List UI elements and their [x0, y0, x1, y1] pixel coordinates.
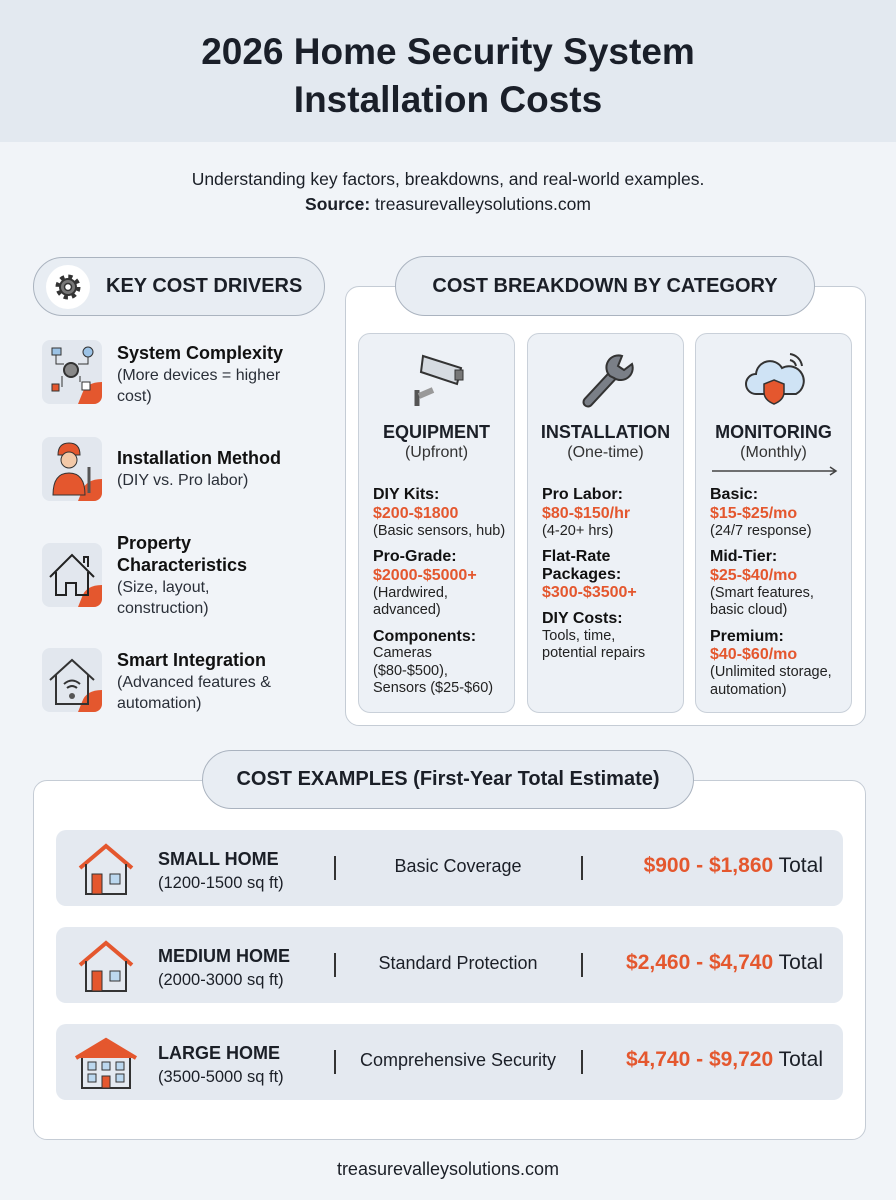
title	[201, 31, 695, 120]
column: monitoring: $40-$60/mo	[710, 646, 797, 663]
column: monitoring: MONITORING	[715, 422, 832, 442]
row: small home: $900 - $1,860 Total	[644, 854, 823, 877]
row: small home: Basic Coverage	[394, 856, 522, 876]
pill: key cost drivers	[33, 257, 325, 316]
column: installation: (One-time)	[567, 444, 644, 461]
column: monitoring: $15-$25/mo	[710, 504, 797, 522]
driver: smart integration	[42, 648, 102, 712]
subtitle: Source: treasurevalleysolutions.com	[305, 194, 591, 214]
title: 2026 Home Security System	[201, 31, 695, 72]
column: monitoring	[695, 333, 852, 713]
icon: smart house	[42, 648, 102, 712]
row: medium home: (2000-3000 sq ft)	[158, 971, 284, 989]
driver: property characteristics	[42, 543, 102, 607]
panel: cost examples	[33, 780, 866, 1140]
pill: cost examples heading	[202, 750, 694, 809]
text: smart integration: Smart Integration	[117, 650, 266, 670]
footer: treasurevalleysolutions.com	[337, 1159, 559, 1179]
driver: system complexity	[42, 340, 102, 404]
text: system complexity	[117, 343, 283, 405]
text: installation method: (DIY vs. Pro labor)	[117, 472, 248, 489]
column: installation: INSTALLATION	[541, 422, 670, 442]
row: large home: LARGE HOME	[158, 1043, 280, 1063]
text: property characteristics: construction)	[117, 600, 209, 617]
column: monitoring: $25-$40/mo	[710, 566, 797, 584]
column: equipment	[358, 333, 515, 713]
column: equipment: Pro-Grade:	[373, 548, 457, 565]
icon: wrench	[582, 354, 634, 408]
title: Installation Costs	[294, 79, 602, 120]
row: large home: (3500-5000 sq ft)	[158, 1068, 284, 1086]
arrow	[712, 466, 838, 476]
icon: camera	[414, 354, 464, 406]
column: monitoring: Mid-Tier:	[710, 548, 777, 565]
column: installation: Packages:	[542, 566, 621, 582]
icon: medium house	[78, 940, 134, 992]
column: equipment: DIY Kits:	[373, 486, 439, 503]
column: installation: $80-$150/hr	[542, 504, 630, 522]
row: small home: SMALL HOME	[158, 849, 279, 869]
text: smart integration: (Advanced features &	[117, 674, 271, 691]
column: installation: Pro Labor:	[542, 486, 623, 503]
column: installation: $300-$3500+	[542, 584, 637, 601]
column: equipment: ($80-$500),	[373, 662, 448, 678]
pill: cost breakdown heading	[395, 256, 815, 316]
column: equipment: EQUIPMENT	[383, 422, 490, 442]
column: installation	[527, 333, 684, 713]
text: system complexity: System Complexity	[117, 343, 283, 363]
text: property characteristics: Characteristics	[117, 555, 247, 575]
icon: house outline	[42, 543, 102, 607]
row: medium home: MEDIUM HOME	[158, 946, 290, 966]
row: small home: (1200-1500 sq ft)	[158, 874, 284, 892]
column: equipment: $2000-$5000+	[373, 566, 477, 584]
column: equipment: (Upfront)	[405, 444, 468, 461]
column: monitoring: Premium:	[710, 628, 784, 644]
column: monitoring: basic cloud) (Unlimited storage,	[710, 602, 832, 680]
row: medium home: Standard Protection	[378, 953, 538, 973]
column: installation: potential repairs	[542, 645, 645, 661]
header band	[0, 0, 896, 142]
icon: large house	[75, 1038, 137, 1089]
text: smart integration	[117, 650, 271, 712]
column: equipment: (Basic sensors, hub) (Hardwired,	[373, 522, 505, 600]
column: monitoring: Basic:	[710, 486, 758, 503]
icon: small house	[78, 844, 134, 895]
icon: network gear	[42, 340, 102, 404]
column: installation: (4-20+ hrs) Tools, time,	[542, 522, 615, 644]
text: property characteristics: Property	[117, 533, 191, 553]
pill: cost examples heading: COST EXAMPLES (First-Year Total Estimate)	[236, 768, 660, 790]
pill: cost breakdown heading: COST BREAKDOWN BY CATEGORY	[432, 274, 778, 296]
text: installation method	[117, 448, 281, 489]
row: large home	[56, 1024, 843, 1100]
row: small home	[56, 830, 843, 906]
column: equipment: $200-$1800	[373, 504, 458, 522]
pill: key cost drivers: KEY COST DRIVERS	[106, 275, 302, 297]
column: installation: Flat-Rate	[542, 548, 610, 565]
text: property characteristics: (Size, layout,	[117, 579, 209, 596]
text: installation method: Installation Method	[117, 448, 281, 468]
text: system complexity: cost)	[117, 388, 152, 405]
row: large home: $4,740 - $9,720 Total	[626, 1048, 823, 1071]
row: medium home	[56, 927, 843, 1003]
column: equipment: Components:	[373, 628, 476, 644]
row: medium home: $2,460 - $4,740 Total	[626, 951, 823, 974]
row: large home: Comprehensive Security	[360, 1050, 556, 1070]
subtitle	[192, 169, 704, 214]
column: monitoring: (Monthly)	[740, 444, 807, 461]
text: system complexity: (More devices = higher	[117, 367, 280, 384]
subtitle: Understanding key factors, breakdowns, and real-world examples.	[192, 169, 704, 189]
icon: gear	[46, 265, 90, 309]
icon: cloud shield	[745, 353, 805, 405]
driver: installation method	[42, 437, 102, 501]
column: equipment: advanced) Cameras	[373, 602, 441, 661]
column: monitoring: (24/7 response) (Smart features,	[710, 522, 814, 600]
column: monitoring: automation)	[710, 682, 787, 698]
text: smart integration: automation)	[117, 695, 202, 712]
panel: cost breakdown	[345, 286, 866, 726]
column: installation: DIY Costs:	[542, 610, 623, 627]
column: equipment: Sensors ($25-$60)	[373, 680, 493, 696]
text: property characteristics	[117, 533, 247, 617]
icon: worker	[42, 437, 102, 501]
